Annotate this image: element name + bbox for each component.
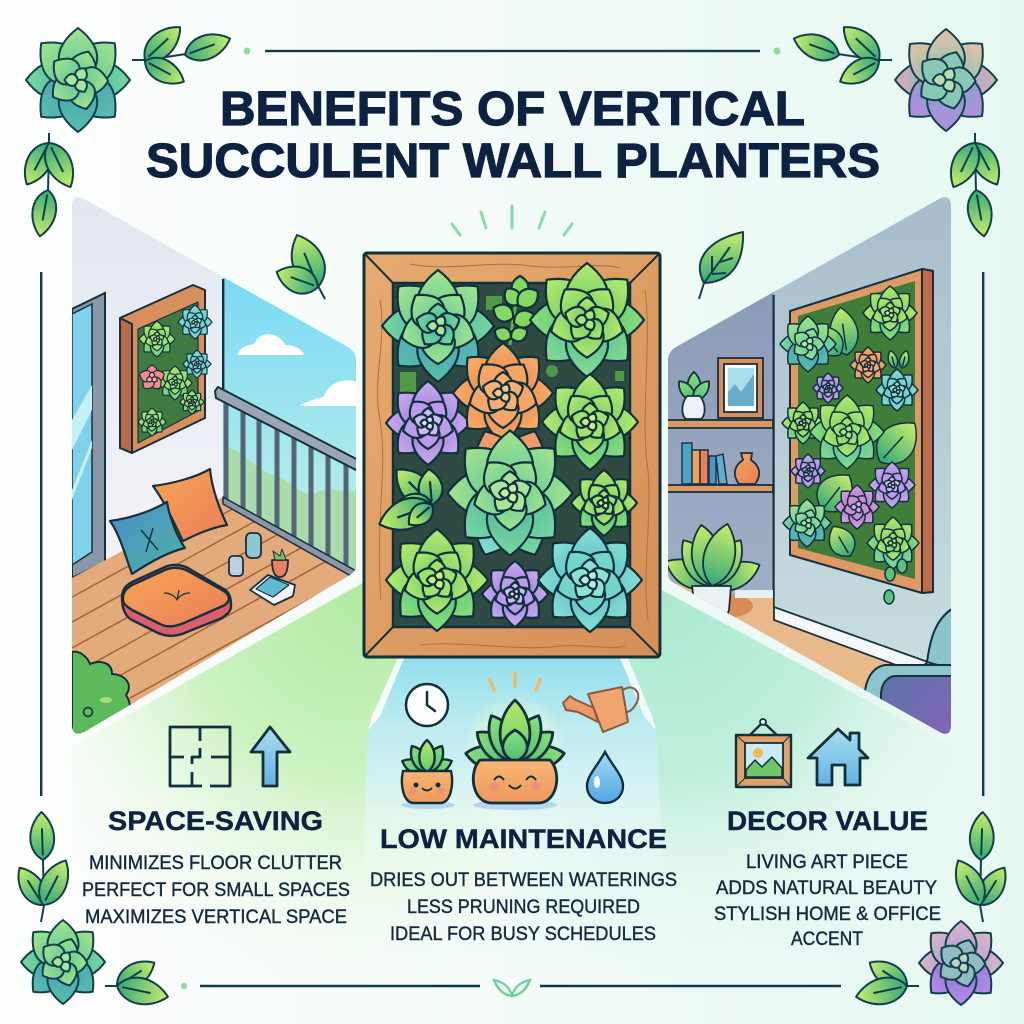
- bottom ornamental rule: [181, 980, 841, 996]
- moss patches: [400, 296, 624, 392]
- leaf sprig upper-left side: [17, 133, 81, 238]
- icon: up arrow: [251, 727, 290, 786]
- succulent green top-right: [530, 263, 644, 377]
- floor: [668, 582, 951, 745]
- text: low maintenance list: IDEAL FOR BUSY SCHEDULES: [390, 924, 656, 945]
- text: low maintenance list: LESS PRUNING REQUIRED: [407, 897, 640, 918]
- mini wall planter: [120, 285, 212, 453]
- floating leaf left: [272, 229, 332, 299]
- shelf plant in white vase: [678, 371, 710, 420]
- clouds: [238, 334, 358, 406]
- leaf sprig bottom-left: [105, 953, 171, 1009]
- succulent green right: [542, 374, 638, 470]
- leaf cluster left: [374, 460, 444, 538]
- text: decor value list: ACCENT: [791, 929, 863, 950]
- wedge: right mint: [512, 590, 952, 1000]
- succulent teal top-left: [381, 270, 494, 383]
- orange shelf vase: [735, 453, 759, 484]
- corner succulent bottom-right: [919, 921, 1003, 1005]
- leaf sprig top-left: [132, 19, 234, 91]
- floor potted plant: [668, 523, 760, 614]
- side rule left: [40, 272, 42, 796]
- centre planter: [364, 253, 660, 657]
- floating leaf right: [699, 232, 743, 299]
- wedge: left green: [72, 582, 512, 1000]
- succulent purple small: [482, 561, 548, 627]
- text: decor value list: STYLISH HOME & OFFICE: [714, 904, 941, 925]
- books: [682, 443, 727, 484]
- floor cushion: [122, 565, 231, 636]
- icon: house: [808, 729, 868, 785]
- railing: [215, 387, 360, 580]
- balcony wall: [72, 190, 224, 590]
- succulent big centre: [447, 422, 573, 564]
- text: low maintenance list: DRIES OUT BETWEEN WATERINGS: [370, 870, 677, 891]
- icon: small potted succulent: [400, 740, 455, 809]
- rug: [702, 594, 753, 618]
- deck floor: [72, 497, 355, 734]
- succulent purple: [386, 381, 470, 465]
- leaf sprig upper-right side: [943, 133, 1007, 238]
- icon: large smiling potted succulent: [464, 700, 566, 810]
- glass door: [72, 293, 105, 578]
- bush: [72, 652, 130, 742]
- column: decor value: [714, 719, 941, 950]
- succulent orange: [450, 342, 554, 446]
- wedge: centre blue: [362, 658, 664, 880]
- text: low maintenance list: [370, 870, 677, 945]
- text: decor value list: LIVING ART PIECE: [746, 852, 908, 873]
- large wall planter: [780, 269, 933, 604]
- icon: hanging picture: [736, 719, 791, 787]
- baseboards: [735, 590, 928, 672]
- text: space-saving list: MINIMIZES FLOOR CLUTTER: [89, 853, 342, 874]
- icon: watering can: [563, 687, 638, 732]
- title: BENEFITS OF VERTICAL: [220, 83, 805, 136]
- sprig: [490, 276, 543, 345]
- room right wall: [774, 190, 954, 680]
- leaf sprig bottom-right: [853, 953, 919, 1009]
- column: low maintenance: [370, 673, 677, 945]
- top ornamental rule: [244, 48, 780, 54]
- cups, tiny plant and book: [229, 533, 295, 605]
- succulents: [374, 263, 644, 632]
- orange pillow: [153, 469, 227, 541]
- title: SUCCULENT WALL PLANTERS: [146, 135, 880, 188]
- title: [146, 83, 880, 188]
- planter dark soil: [393, 283, 630, 627]
- succulent small green right: [571, 470, 637, 536]
- planter wooden frame: [364, 253, 660, 657]
- text: decor value list: ADDS NATURAL BEAUTY: [716, 878, 937, 899]
- sun rays and glow: [463, 673, 567, 797]
- corner succulent top-right: [895, 29, 997, 131]
- shelf picture frame: [718, 358, 763, 418]
- leaf sprig lower-right side: [947, 812, 1014, 922]
- heading: space-saving: SPACE-SAVING: [108, 806, 323, 836]
- corner succulent top-left: [26, 28, 130, 132]
- hills: [224, 446, 358, 580]
- text: space-saving list: MAXIMIZES VERTICAL SPACE: [85, 907, 347, 928]
- shelves: [666, 420, 773, 492]
- panel: living room scene: [660, 190, 955, 745]
- side rule right: [982, 272, 984, 796]
- heading: low maintenance: LOW MAINTENANCE: [380, 824, 667, 854]
- icon: water drop: [587, 752, 623, 803]
- room corner line: [772, 295, 775, 609]
- blue pillow: [110, 502, 185, 574]
- text: decor value list: [714, 852, 941, 950]
- column: space-saving: [82, 727, 350, 928]
- room left wall: [668, 270, 774, 610]
- leaf sprig lower-left side: [10, 812, 77, 922]
- text: space-saving list: [82, 853, 350, 928]
- icon: floor plan: [170, 727, 230, 786]
- heading: decor value: DECOR VALUE: [727, 806, 928, 836]
- icon: clock: [406, 684, 448, 726]
- panel: balcony scene: [72, 190, 360, 770]
- text: space-saving list: PERFECT FOR SMALL SPACES: [82, 880, 350, 901]
- leaf sprig top-right: [790, 19, 892, 91]
- wall edge line: [222, 279, 224, 393]
- balcony sky: [223, 270, 358, 580]
- succulent lime bottom-left: [386, 529, 488, 631]
- sofa: [864, 608, 951, 734]
- deck plank lines: [72, 509, 326, 699]
- corner succulent bottom-left: [21, 920, 105, 1004]
- succulent blue bottom-right: [538, 528, 642, 632]
- accent rays above planter: [452, 206, 572, 235]
